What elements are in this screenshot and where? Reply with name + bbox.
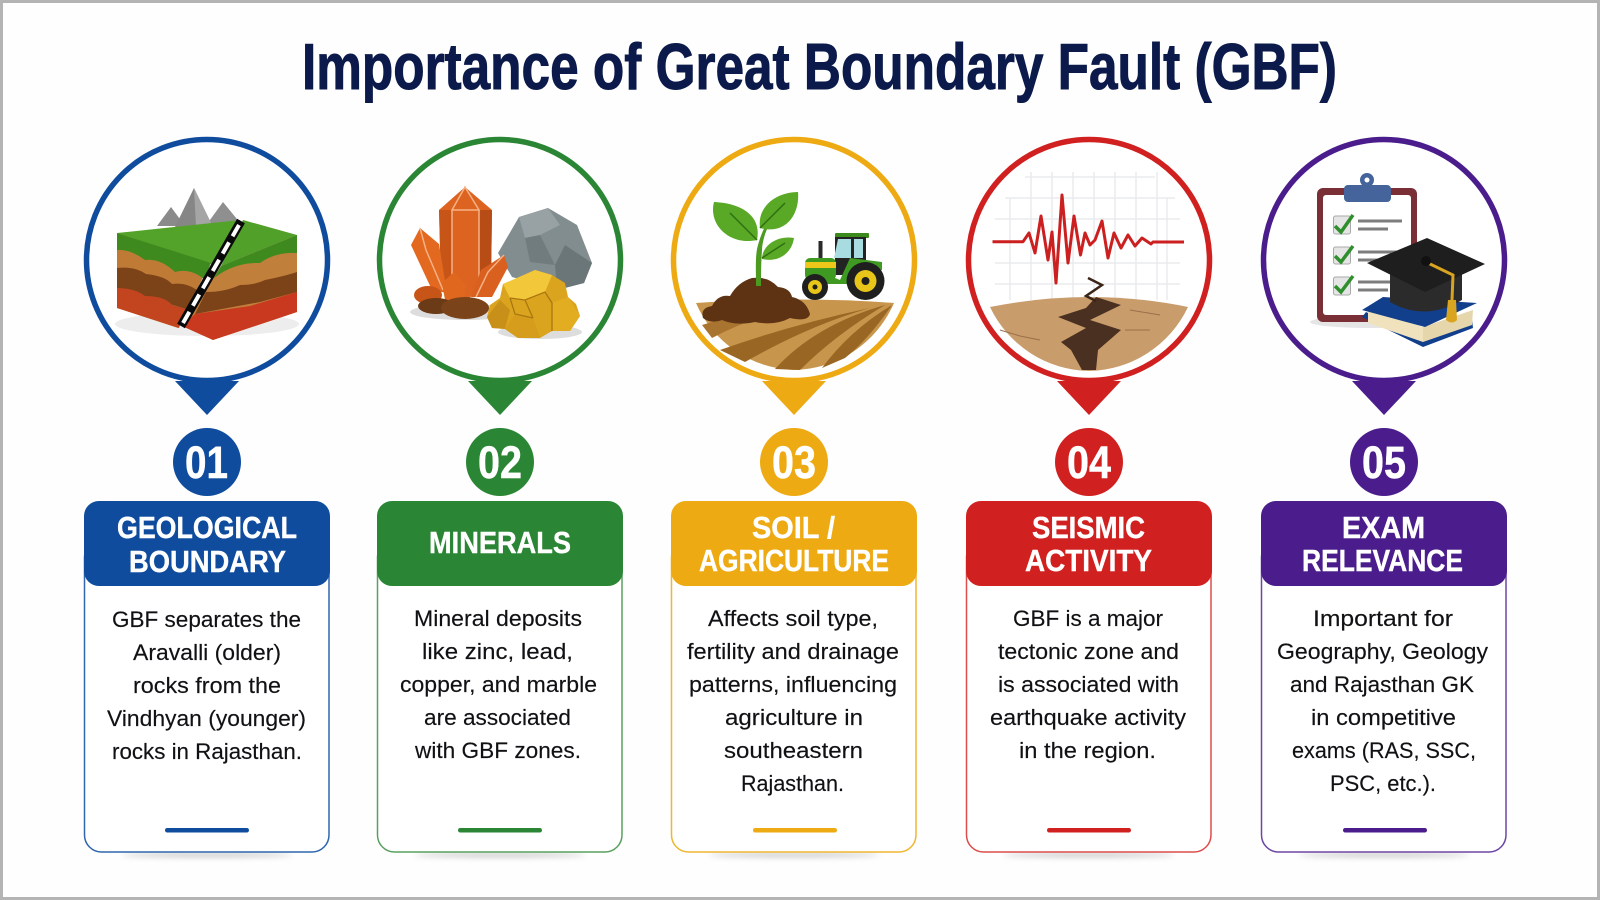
icon ring: exam (1264, 140, 1504, 415)
card text (687, 606, 899, 796)
panel: seismic activity (966, 140, 1212, 857)
card text: and Rajasthan GK (1290, 672, 1474, 697)
card text (107, 607, 306, 764)
card text: GBF is a major (1013, 606, 1164, 631)
card text: exams (RAS, SSC, (1292, 738, 1476, 763)
card header: GEOLOGICAL (117, 511, 297, 545)
card text: agriculture in (725, 705, 863, 730)
card text: Rajasthan. (741, 771, 844, 796)
icon: clipboard, graduation cap and book (1310, 173, 1485, 347)
number badge 02 (466, 428, 534, 496)
card text: PSC, etc.). (1330, 771, 1436, 796)
number badge 03: 03 (772, 437, 816, 488)
card header: EXAM (1342, 511, 1425, 545)
card header (671, 501, 917, 586)
icon ring: soil (674, 140, 914, 415)
card text: southeastern (724, 738, 863, 763)
card text: Mineral deposits (414, 606, 582, 631)
card header: SEISMIC (1032, 511, 1145, 545)
card text: are associated (424, 705, 571, 730)
card header: RELEVANCE (1302, 544, 1463, 578)
card body (1262, 540, 1506, 857)
panel: geological boundary (84, 140, 330, 857)
number badge 05: 05 (1362, 437, 1406, 488)
icon: seismograph and ground crack (990, 172, 1188, 371)
card text: Important for (1313, 606, 1454, 631)
number badge 04: 04 (1067, 437, 1111, 488)
card text (1277, 606, 1489, 796)
number badge 03 (760, 428, 828, 496)
card header: ACTIVITY (1025, 544, 1152, 578)
number badge 02: 02 (478, 437, 522, 488)
icon ring: seismic (968, 140, 1210, 415)
card text: tectonic zone and (998, 639, 1179, 664)
card text: earthquake activity (990, 705, 1187, 730)
card header: AGRICULTURE (699, 544, 889, 578)
card header (966, 501, 1212, 586)
card text: rocks in Rajasthan. (112, 739, 302, 764)
icon: crystals, rock and gold (410, 187, 592, 339)
number badge 05 (1350, 428, 1418, 496)
card text: GBF separates the (112, 607, 301, 632)
card header: MINERALS (429, 526, 571, 560)
panel: exam relevance (1261, 140, 1507, 857)
card text: is associated with (998, 672, 1179, 697)
card text: in the region. (1019, 738, 1156, 763)
card header (84, 501, 330, 586)
card body (672, 540, 916, 857)
card text: Geography, Geology (1277, 639, 1489, 664)
card text: rocks from the (133, 673, 281, 698)
card body (966, 540, 1211, 857)
icon: fault block with mountains (115, 188, 299, 340)
card header: SOIL / (752, 511, 835, 545)
card header (377, 501, 623, 586)
card text: copper, and marble (400, 672, 597, 697)
card text: Vindhyan (younger) (107, 706, 306, 731)
icon ring: minerals (380, 140, 620, 415)
card text: Aravalli (older) (133, 640, 281, 665)
card text: Affects soil type, (708, 606, 878, 631)
card header: BOUNDARY (129, 545, 286, 579)
number badge 04 (1055, 428, 1123, 496)
card text: with GBF zones. (414, 738, 581, 763)
card text: fertility and drainage (687, 639, 899, 664)
number badge 01 (173, 428, 241, 496)
card body (378, 540, 622, 857)
number badge 01: 01 (185, 437, 228, 488)
panel: soil / agriculture (671, 140, 917, 857)
card text: like zinc, lead, (422, 639, 573, 664)
icon: plant, soil and tractor (696, 192, 894, 370)
card text (400, 606, 597, 763)
panel: minerals (377, 140, 623, 857)
card text: in competitive (1311, 705, 1456, 730)
card body (84, 540, 329, 857)
card text (990, 606, 1187, 763)
card text: patterns, influencing (689, 672, 897, 697)
card header (1261, 501, 1507, 586)
icon ring: geological boundary (86, 140, 328, 415)
title: Importance of Great Boundary Fault (GBF) (302, 30, 1337, 103)
